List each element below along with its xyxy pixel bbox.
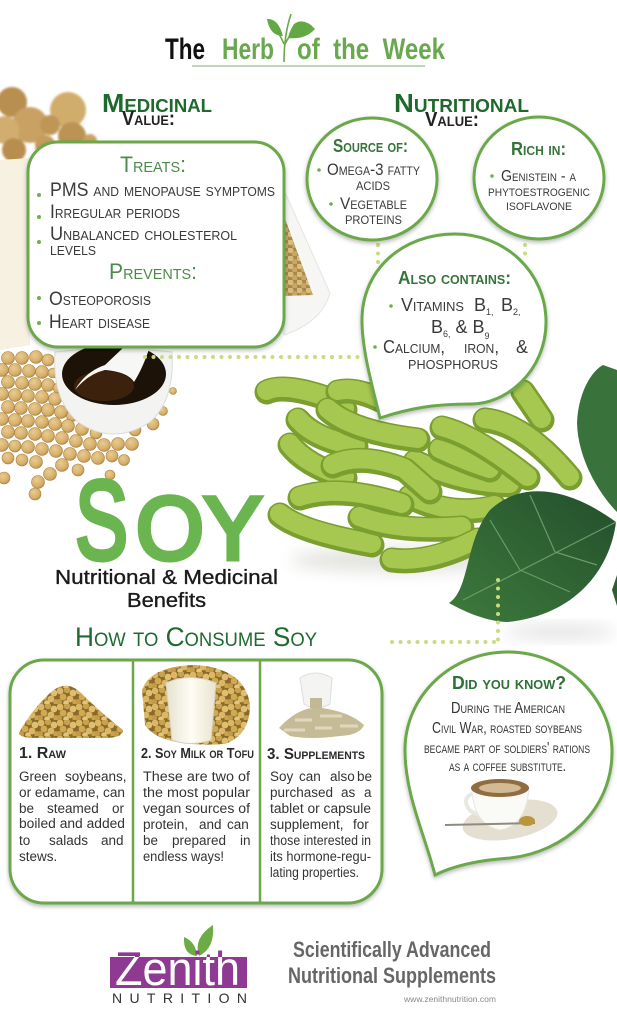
photo: bowl of soy sauce [55, 343, 172, 434]
column: raw: salads [49, 833, 88, 848]
column: supplements [267, 673, 372, 880]
callout: did you know: During the American [451, 700, 565, 717]
subtitle: nutritional and medicinal benefits: Nutritional & Medicinal [55, 567, 278, 589]
photo: edamame pods [266, 387, 570, 572]
treats and prevents box [28, 142, 284, 347]
column: raw: soybeans, [65, 769, 127, 784]
circle: source of: Source of: [333, 136, 408, 156]
title: the herb of the week: The [165, 33, 205, 66]
column: raw: Green [19, 769, 57, 784]
column: supplements: supplement, [270, 817, 344, 832]
treats list: Irregular periods [50, 202, 180, 223]
callout: did you know: Did you know? [452, 673, 566, 693]
photo: bowl of textured soy [283, 188, 330, 335]
website url: www.zenithnutrition.com [403, 994, 496, 1004]
logo: zenith nutrition [110, 925, 247, 1006]
callout: also contains: 9 [485, 331, 490, 341]
callout: also contains: 6, [443, 329, 451, 339]
treats list: Unbalanced cholesterol [50, 224, 237, 245]
column: raw: to [19, 833, 30, 848]
tagline [288, 937, 496, 988]
column: soy milk or tofu: 2. Soy Milk or Tofu [141, 745, 254, 762]
logo: zenith nutrition: NUTRITION [112, 990, 247, 1006]
callout: also contains [362, 234, 546, 418]
column: raw [19, 686, 127, 864]
callout: also contains: Calcium, [383, 337, 445, 357]
title: the herb of the week [165, 14, 445, 66]
column: supplements: purchased [270, 785, 333, 800]
icon: coffee cup [445, 779, 561, 847]
column: supplements: be [357, 769, 372, 784]
panel: medicinal value [28, 88, 284, 347]
circle: source of: Omega-3 fatty [327, 160, 420, 179]
column: supplements: as [341, 785, 356, 800]
column: soy milk or tofu: vegan sources of [143, 801, 250, 816]
photo: soy chunks top left [0, 87, 97, 162]
subtitle: nutritional and medicinal benefits: Benefits [127, 590, 206, 612]
subtitle: nutritional and medicinal benefits [55, 567, 278, 612]
prevents heading: Prevents: [109, 259, 197, 284]
treats list [37, 180, 275, 260]
column: raw: stews. [19, 849, 57, 864]
callout: also contains: 2, [513, 307, 521, 317]
column: soy milk or tofu: and [199, 817, 222, 832]
logo: zenith nutrition: Zenith [115, 942, 240, 995]
icon: soybean pile [19, 686, 123, 738]
circle: source of: proteins [345, 209, 402, 228]
callout: also contains: B [474, 295, 486, 315]
column: raw: 1. Raw [19, 745, 67, 762]
icon: milk glass on soybeans [142, 665, 250, 745]
column: soy milk or tofu: These are two of [143, 769, 250, 784]
callout: also contains: iron, [464, 337, 499, 357]
callout: did you know: as a coffee substitute. [449, 758, 566, 775]
column: raw: or edamame, can [19, 785, 125, 800]
column: soy milk or tofu: protein, [143, 817, 188, 832]
circle: rich in: phytoestrogenic [488, 183, 590, 200]
column: supplements: its hormone-regu- [270, 849, 371, 864]
panel: how to consume [10, 660, 382, 903]
photo: scattered soybeans [0, 350, 176, 500]
heading: nutritional value [394, 88, 529, 131]
heading: how to consume soy: How to Consume Soy [75, 622, 317, 652]
logo: zenith nutrition: Zenith [115, 942, 240, 995]
column: raw: boiled and added [19, 816, 125, 831]
icon: tablets and bottle [279, 673, 364, 738]
column: soy milk or tofu: in [240, 833, 251, 848]
column: soy milk or tofu: prepared [172, 833, 226, 848]
prevents list [37, 289, 151, 333]
photo: large soy leaf [449, 491, 616, 622]
connector dots to fact [392, 580, 498, 642]
heading: nutritional value: Value: [425, 109, 479, 131]
tagline: Scientifically Advanced [293, 937, 491, 962]
column: supplements: a [364, 785, 372, 800]
treats list: PMS and menopause symptoms [50, 180, 275, 201]
column: soy milk or tofu: endless ways! [143, 849, 224, 864]
column: supplements: 3. Supplements [267, 746, 365, 763]
circle: rich in: Rich in: [511, 139, 566, 159]
callout: also contains: Also contains: [398, 268, 511, 288]
circle: rich in [474, 117, 604, 239]
column: raw: or [112, 801, 125, 816]
callout: also contains: 1, [486, 307, 494, 317]
column: supplements: for [353, 817, 369, 832]
column: soy milk or tofu: the most popular [143, 785, 251, 800]
icon: logo leaves [184, 925, 213, 956]
column: soy milk or tofu [141, 665, 254, 864]
callout: also contains: B [501, 295, 513, 315]
column: supplements: those interested in [270, 833, 371, 848]
icon: sprout [267, 14, 315, 62]
circle: source of: Vegetable [340, 194, 407, 213]
treats heading: Treats: [120, 152, 186, 177]
circle: source of [307, 118, 437, 240]
column: raw: be [19, 801, 34, 816]
callout: also contains: & B [451, 317, 485, 337]
circle: rich in: Genistein - a [501, 168, 577, 185]
prevents list: Heart disease [49, 312, 150, 333]
column: supplements: also [330, 769, 355, 784]
callout: also contains: Vitamins [401, 295, 464, 315]
column: raw: and [101, 833, 124, 848]
panel: nutritional value [307, 88, 604, 418]
callout: did you know [405, 652, 612, 875]
treats list: levels [50, 239, 96, 260]
column: supplements: Soy [270, 769, 294, 784]
callout: also contains: B [431, 317, 443, 337]
heading: medicinal value [102, 88, 212, 130]
column: supplements: can [299, 769, 321, 784]
column: soy milk or tofu: can [227, 817, 249, 832]
connector dots [145, 245, 525, 357]
callout: also contains: phosphorus [408, 353, 498, 373]
circle: rich in: isoflavone [506, 197, 572, 214]
heading: nutritional value: Nutritional [394, 88, 529, 118]
column: supplements: tablet or capsule [270, 801, 371, 816]
column: raw: steamed [47, 801, 99, 816]
column: soy milk or tofu: be [143, 833, 158, 848]
heading: medicinal value: Value: [122, 108, 175, 130]
photo: green leaves [505, 365, 617, 638]
prevents list: Osteoporosis [49, 289, 151, 310]
title: the herb of the week: Herb [222, 33, 274, 66]
title: the herb of the week: of the Week [297, 33, 445, 66]
column: supplements: lating properties. [270, 865, 359, 880]
tagline: Nutritional Supplements [288, 963, 496, 988]
heading: soy: OY [136, 478, 262, 578]
heading: soy [75, 458, 262, 583]
heading: soy: S [75, 458, 128, 583]
callout: also contains: & [516, 337, 528, 357]
heading: medicinal value: Medicinal [102, 88, 212, 118]
circle: source of: acids [356, 175, 390, 194]
photo: glass of soy milk [0, 158, 30, 350]
